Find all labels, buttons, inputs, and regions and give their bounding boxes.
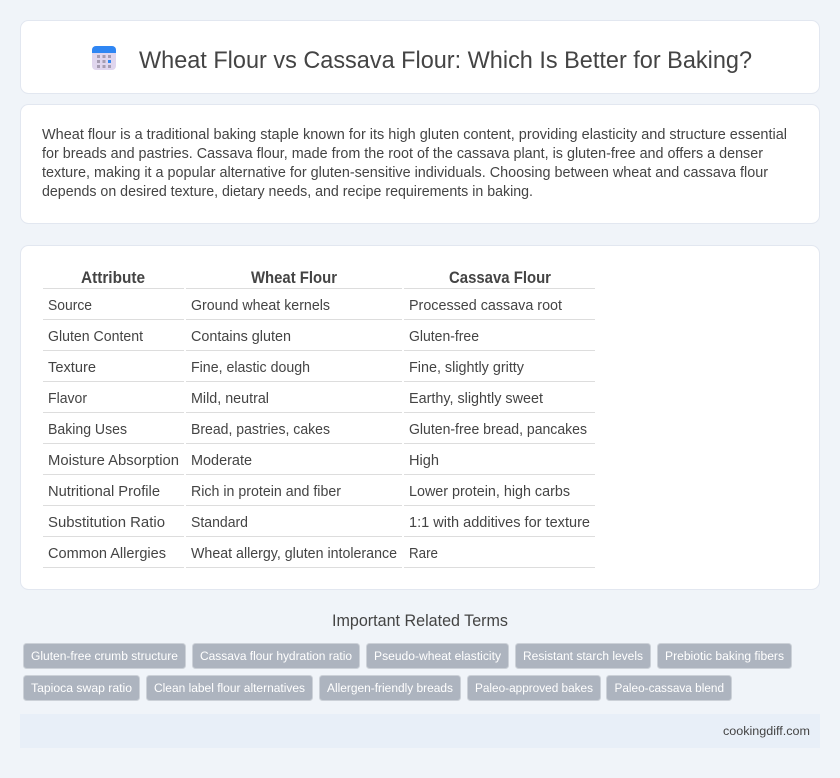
row: Baking Uses: Bread, pastries, cakes: [191, 422, 330, 438]
row: Nutritional Profile: Rich in protein and fiber: [191, 484, 341, 500]
row: Flavor: Mild, neutral: [191, 391, 269, 407]
row: Texture: [43, 360, 595, 382]
row: Substitution Ratio: 1:1 with additives for texture: [409, 515, 590, 531]
text block: introduction paragraph: Wheat flour is a traditional baking staple known for its high gluten content, providing elasticity and structure essential: [42, 127, 787, 143]
row: Moisture Absorption: [43, 453, 595, 474]
title: Wheat Flour vs Cassava Flour: Which Is Better for Baking?: [139, 47, 752, 74]
row: Common Allergies: [43, 546, 595, 568]
row: Flavor: [43, 391, 595, 412]
row: Substitution Ratio: Substitution Ratio: [48, 515, 165, 531]
panel: introduction: [20, 104, 820, 224]
row: Common Allergies: Rare: [409, 546, 438, 562]
row: Nutritional Profile: Nutritional Profile: [48, 484, 160, 500]
row: Gluten Content: Gluten-free: [409, 329, 479, 345]
tag: Allergen-friendly breads: [320, 676, 460, 700]
row: Flavor: Flavor: [48, 391, 87, 407]
row: Moisture Absorption: High: [409, 453, 439, 469]
tag: Cassava flour hydration ratio: [192, 644, 360, 668]
tag: Paleo-cassava blend: [606, 676, 732, 700]
text block: introduction paragraph: texture, making it a popular alternative for gluten-sensitive individuals. Choosing between wheat and cassava flour: [42, 165, 768, 181]
table header row: Wheat Flour: [251, 269, 338, 287]
tag: Gluten-free crumb structure: Gluten-free crumb structure: [31, 649, 178, 663]
tag: Tapioca swap ratio: [24, 676, 140, 700]
tag: Resistant starch levels: Resistant starch levels: [523, 649, 643, 663]
footer: [20, 714, 820, 748]
row: Gluten Content: [43, 329, 595, 350]
heading: important related terms: Important Related Terms: [332, 612, 508, 630]
row: Texture: Fine, elastic dough: [191, 360, 310, 376]
table header row: Cassava Flour: [449, 269, 552, 287]
row: Baking Uses: [43, 422, 595, 444]
row: Moisture Absorption: Moisture Absorption: [48, 453, 179, 469]
row: Source: Processed cassava root: [409, 298, 562, 314]
tag: Paleo-approved bakes: [468, 676, 600, 700]
tag: Clean label flour alternatives: Clean label flour alternatives: [154, 681, 305, 695]
row: Nutritional Profile: Lower protein, high carbs: [409, 484, 570, 500]
tag: Resistant starch levels: [516, 644, 650, 668]
text block: introduction paragraph: depends on desired texture, dietary needs, and recipe requirements in baking.: [42, 184, 533, 200]
tag: Allergen-friendly breads: Allergen-friendly breads: [327, 681, 453, 695]
row: Baking Uses: Gluten-free bread, pancakes: [409, 422, 587, 438]
row: Nutritional Profile: [43, 484, 595, 506]
row: Source: Source: [48, 298, 92, 314]
row: Baking Uses: Baking Uses: [48, 422, 127, 438]
row: Source: Ground wheat kernels: [191, 298, 330, 314]
panel: header: [20, 20, 820, 94]
row: Flavor: Earthy, slightly sweet: [409, 391, 543, 407]
table header row: [43, 269, 595, 288]
row: Substitution Ratio: Standard: [191, 515, 248, 531]
text block: introduction paragraph: [42, 127, 787, 200]
footer source text: cookingdiff.com: [723, 724, 810, 738]
tag: Pseudo-wheat elasticity: [366, 644, 508, 668]
row: Texture: Texture: [48, 360, 96, 376]
row: Moisture Absorption: Moderate: [191, 453, 252, 469]
panel: comparison table: [20, 246, 820, 590]
tag: Cassava flour hydration ratio: Cassava flour hydration ratio: [200, 649, 352, 663]
tag: Tapioca swap ratio: Tapioca swap ratio: [31, 681, 132, 695]
tag: Prebiotic baking fibers: [658, 644, 792, 668]
row: Substitution Ratio: [43, 515, 595, 536]
icon: calendar: [92, 46, 116, 70]
row: Common Allergies: Wheat allergy, gluten intolerance: [191, 546, 397, 562]
row: Common Allergies: Common Allergies: [48, 546, 166, 562]
tag: Clean label flour alternatives: [146, 676, 312, 700]
row: Texture: Fine, slightly gritty: [409, 360, 525, 376]
table header row: Attribute: [81, 269, 145, 287]
tag: Paleo-cassava blend: Paleo-cassava blend: [614, 681, 724, 695]
text block: introduction paragraph: for breads and pastries. Cassava flour, made from the root of the cassava plant, is gluten-free and offers a denser: [42, 146, 763, 162]
tag: Pseudo-wheat elasticity: Pseudo-wheat elasticity: [374, 649, 502, 663]
row: Source: [43, 298, 595, 320]
row: Gluten Content: Contains gluten: [191, 329, 291, 345]
row: Gluten Content: Gluten Content: [48, 329, 143, 345]
tags: related terms: [24, 644, 792, 700]
tag: Prebiotic baking fibers: Prebiotic baking fibers: [665, 649, 784, 663]
tag: Gluten-free crumb structure: [24, 644, 186, 668]
tag: Paleo-approved bakes: Paleo-approved bakes: [475, 681, 593, 695]
